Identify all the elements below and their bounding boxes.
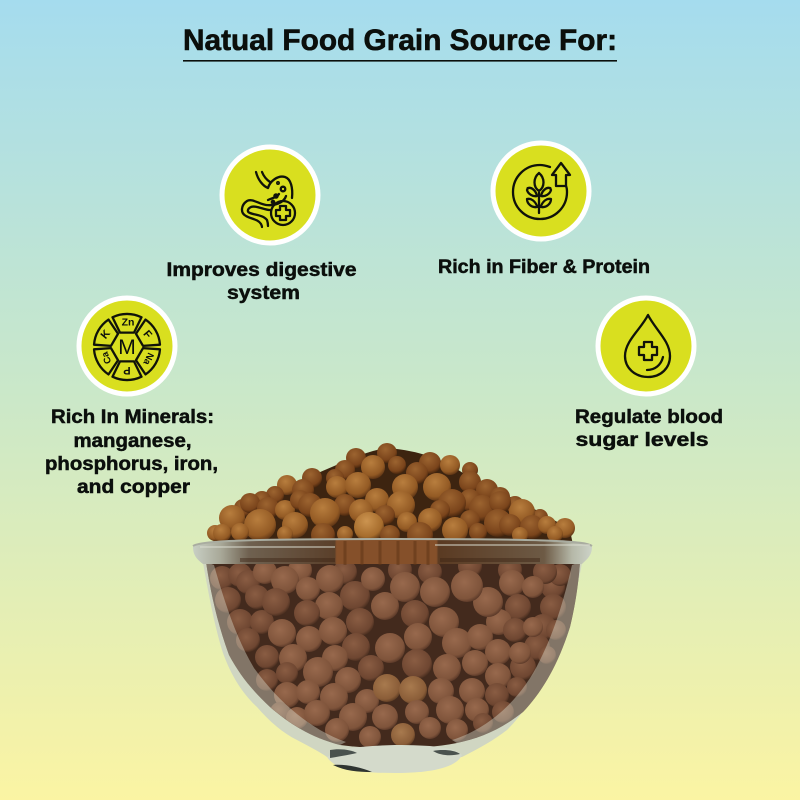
grain mound	[206, 443, 578, 570]
icon: mineral wheel: Ca	[99, 349, 114, 365]
bowl rim with grains seen through	[193, 539, 592, 565]
icon: wheat with up arrow	[493, 143, 589, 239]
icon: mineral wheel: M	[118, 336, 136, 359]
glass bowl of chickpeas	[193, 443, 592, 773]
icon: mineral wheel	[79, 298, 175, 394]
icon: mineral wheel: P	[123, 364, 131, 376]
icon: stomach and intestine with plus badge	[222, 147, 318, 243]
label: rich in minerals: phosphorus, iron,	[45, 454, 218, 475]
bowl glass body	[193, 547, 592, 757]
label: rich in minerals: manganese,	[74, 431, 192, 452]
icon: mineral wheel: Zn	[122, 316, 134, 328]
label: rich in minerals: and copper	[77, 477, 191, 498]
label: rich in minerals: Rich In Minerals:	[51, 407, 214, 428]
glass sheen over contents	[206, 562, 580, 745]
title: Natual Food Grain Source For:	[183, 24, 617, 57]
benefit: fiber and protein	[438, 143, 650, 278]
icon: mineral wheel: F	[140, 328, 154, 341]
icon: blood drop with plus	[598, 298, 694, 394]
label: improves digestive system: system	[227, 283, 300, 304]
label: rich in fiber and protein: Rich in Fiber & Protein	[438, 257, 650, 278]
benefit: digestive system	[166, 147, 356, 304]
label: regulate blood sugar levels: Regulate blood	[575, 407, 723, 428]
icon: mineral wheel: K	[99, 328, 113, 342]
chickpeas inside bowl	[206, 564, 580, 747]
label: improves digestive system: Improves digestive	[166, 260, 356, 281]
icon: mineral wheel: Na	[140, 351, 156, 367]
label: regulate blood sugar levels: sugar levels	[576, 430, 708, 451]
benefit: minerals	[45, 298, 218, 498]
benefit: blood sugar	[575, 298, 723, 451]
bowl base	[327, 745, 462, 773]
